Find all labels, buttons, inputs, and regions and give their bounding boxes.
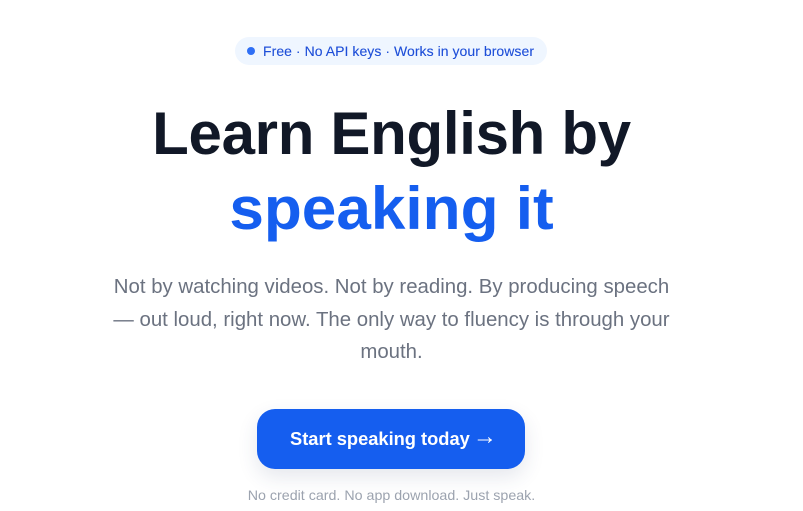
footnote: No credit card. No app download. Just speak. (248, 488, 535, 504)
headline (152, 100, 631, 242)
badge dot (247, 47, 255, 55)
subheading (113, 276, 670, 363)
subheading: — out loud, right now. The only way to fluency is through your (113, 308, 670, 330)
subheading: mouth. (360, 341, 423, 363)
badge (235, 37, 547, 65)
headline: Learn English by (152, 100, 631, 167)
headline: speaking it (229, 175, 554, 242)
call to action button (257, 409, 525, 469)
subheading: Not by watching videos. Not by reading. By producing speech (114, 276, 669, 298)
call to action button: Start speaking today→ (290, 423, 497, 450)
badge text: Free · No API keys · Works in your browser (263, 43, 534, 59)
